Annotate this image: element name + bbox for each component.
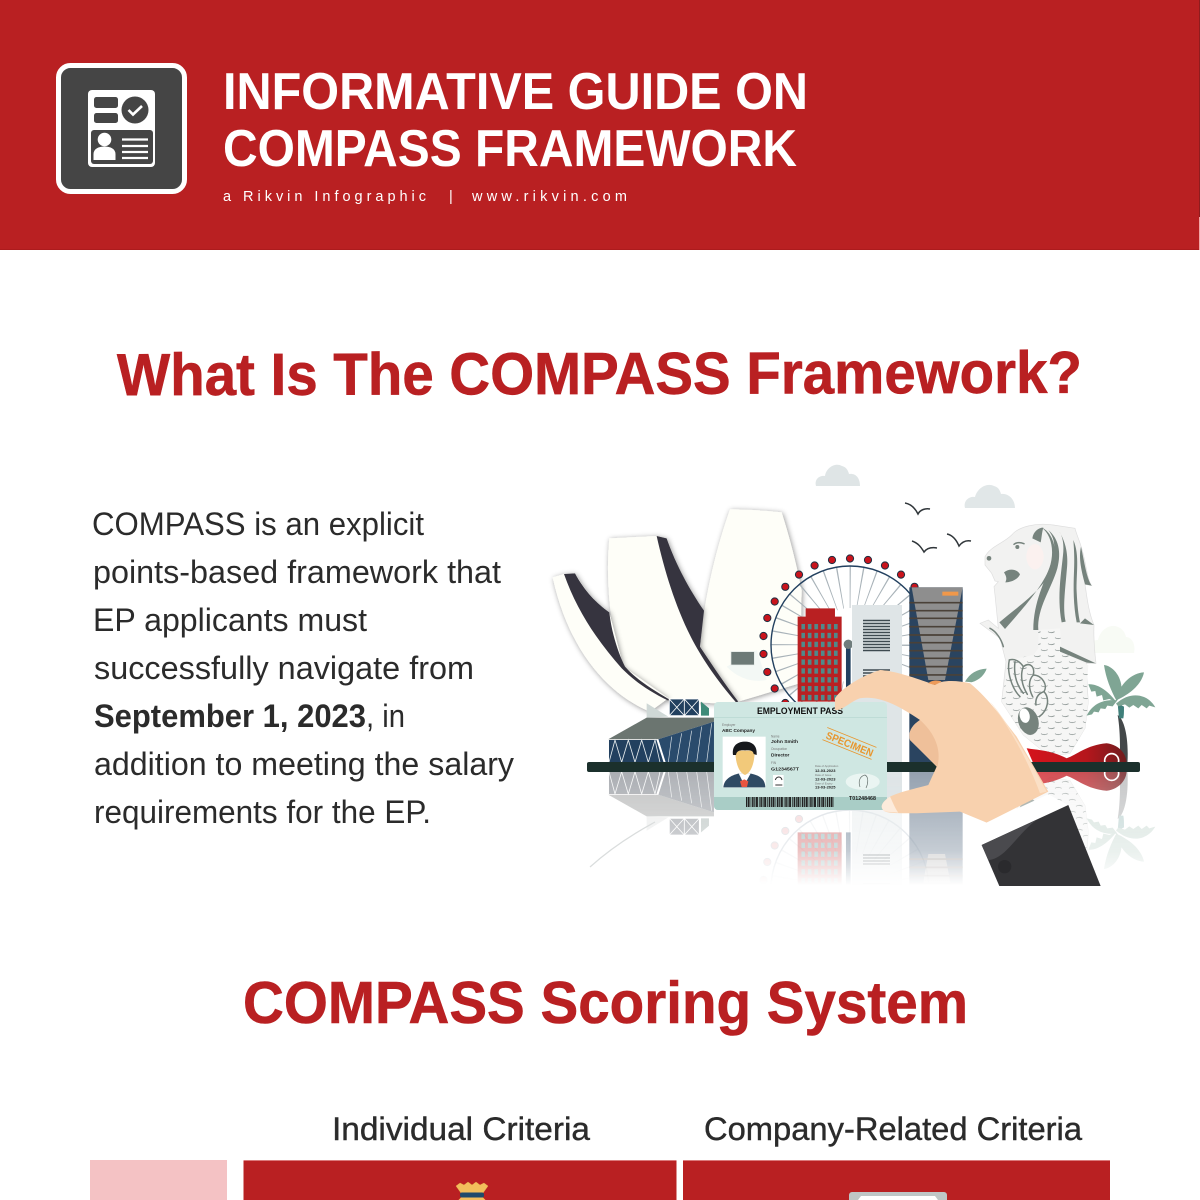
card fields: John Smith: [771, 739, 798, 745]
dark tower: [909, 587, 963, 762]
paragraph: COMPASS description: requirements for the EP.: [94, 794, 431, 830]
card fields: ABC Company: [722, 728, 755, 734]
base line bar: [587, 762, 1140, 772]
heading: what is the framework: What Is The COMPASS Framework?: [117, 339, 1082, 408]
ferris wheel: [760, 555, 929, 724]
card fields: [722, 723, 876, 802]
paragraph: COMPASS description: September 1, 2023: [94, 698, 366, 734]
card fields: Occupation: [771, 747, 787, 751]
subtitle: a Rikvin Infographic: [223, 189, 426, 205]
card fields: Date of Expiry: [815, 782, 833, 786]
card fields: Director: [771, 752, 790, 758]
hand: [835, 670, 1048, 823]
card title: EMPLOYMENT PASS: [757, 706, 843, 717]
card fields: 12-03-2023: [815, 776, 836, 782]
card fields: Name: [771, 734, 780, 738]
paragraph: COMPASS description: COMPASS is an explicit: [92, 506, 424, 542]
card fields: FIN: [771, 761, 777, 765]
paragraph: COMPASS description: [92, 506, 514, 830]
faint museum reflection lines: [590, 822, 655, 867]
paragraph: COMPASS description: successfully navigate from: [94, 650, 474, 686]
barcode: [746, 797, 834, 807]
red swoosh: [1027, 743, 1127, 768]
palm behind tower: [945, 662, 987, 683]
paragraph: COMPASS description: EP applicants must: [93, 602, 367, 638]
header band: [0, 0, 1200, 250]
signature: [773, 775, 784, 787]
paragraph: COMPASS description: , in: [366, 698, 405, 734]
gray building: [852, 605, 902, 810]
card fields: G1234567T: [771, 766, 799, 772]
title: INFORMATIVE GUIDE ON: [223, 63, 808, 121]
employment pass card: [714, 702, 887, 810]
title: [223, 63, 808, 178]
heading: scoring system: COMPASS Scoring System: [243, 970, 968, 1036]
photo: [723, 737, 766, 788]
palm right: [1087, 665, 1155, 765]
card fields: Date of Application: [815, 764, 839, 768]
museum petals: [553, 509, 802, 712]
column label: individual criteria: Individual Criteria: [332, 1111, 591, 1147]
panel: company criteria: [683, 1160, 1110, 1200]
column label: company criteria: Company-Related Criteria: [704, 1111, 1083, 1147]
paragraph: COMPASS description: addition to meeting the salary: [94, 746, 514, 782]
emblem: [846, 774, 880, 790]
birds: [905, 503, 971, 552]
specimen stamp: SPECIMEN: [824, 730, 875, 760]
left low building: [608, 699, 714, 762]
subtitle: |: [449, 189, 453, 205]
icon: ID card with check: [58, 66, 184, 192]
subtitle: www.rikvin.com: [471, 189, 627, 205]
merlion: [980, 524, 1096, 757]
icon: money bag: [456, 1182, 488, 1200]
paragraph: COMPASS description: points-based framework that: [93, 554, 501, 590]
panel: individual criteria: [244, 1160, 676, 1200]
icon: clipboard: [849, 1192, 947, 1200]
card fields: 13-03-2025: [815, 784, 836, 790]
suit sleeve: [982, 794, 1101, 886]
water reflection: [608, 772, 1155, 880]
card fields: 12-03-2023: [815, 768, 836, 773]
subtitle: [223, 189, 627, 205]
panel: row label column: [90, 1160, 227, 1200]
card fields: Date of Issue: [815, 773, 832, 777]
card fields: T01248468: [849, 796, 876, 802]
card fields: Employer: [722, 723, 736, 727]
title: COMPASS FRAMEWORK: [223, 120, 797, 178]
illustration: Singapore skyline with employment pass: [551, 464, 1156, 886]
clouds: [816, 465, 1134, 653]
red building: [798, 608, 842, 702]
wheel hub and pole: [844, 640, 853, 702]
